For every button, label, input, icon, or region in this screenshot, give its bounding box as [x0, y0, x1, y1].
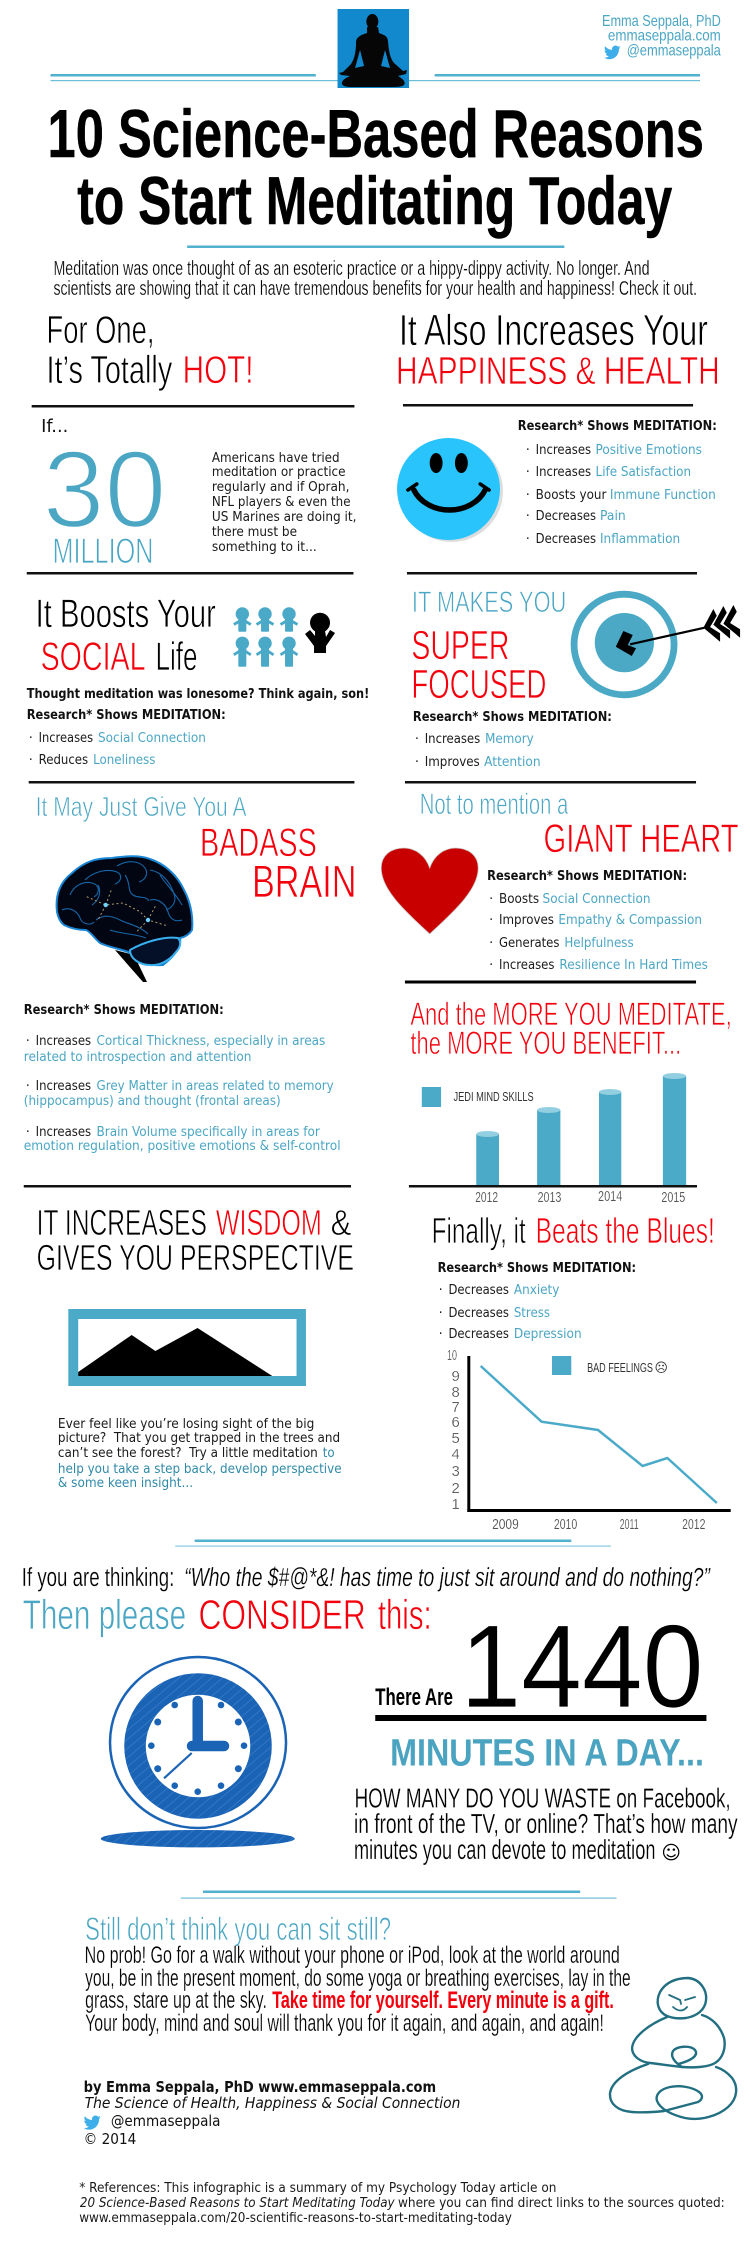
panel: beats the blues: Research* Shows MEDITATION: — [438, 1261, 636, 1276]
list: brain benefits: Increases — [36, 1079, 91, 1094]
bar chart: jedi mind skills: 2012 — [475, 1189, 498, 1206]
references: www.emmaseppala.com/20-scientific-reasons-to-start-meditating-today — [79, 2211, 512, 2226]
panel: wisdom and perspective: WISDOM — [216, 1203, 322, 1243]
text: americans: Americans have tried — [212, 451, 340, 466]
list: focus benefits: Memory — [485, 732, 534, 747]
references: 20 Science-Based Reasons to Start Meditating Today — [80, 2196, 395, 2211]
text: big picture: Ever feel like you’re losing sight of the big — [58, 1417, 314, 1432]
icon: clock — [101, 1657, 295, 1847]
text: how many do you waste: ☺ — [661, 1842, 681, 1864]
bar chart: jedi mind skills — [409, 1073, 697, 1206]
list: focus benefits: · — [415, 732, 419, 747]
line chart: bad feelings: 1 — [451, 1496, 460, 1513]
text: how many do you waste — [354, 1783, 738, 1865]
header rules — [50, 74, 700, 81]
panel: super focused — [411, 586, 740, 770]
panel: 30 million — [41, 416, 356, 571]
bar chart: jedi mind skills: JEDI MIND SKILLS — [453, 1089, 534, 1104]
panel: giant heart: Not to mention a — [420, 788, 569, 821]
list: brain benefits: Cortical Thickness, especially in areas — [97, 1034, 325, 1049]
line chart: bad feelings: BAD FEELINGS — [587, 1360, 653, 1375]
panel: more you meditate — [409, 996, 732, 1206]
list: heart benefits — [489, 892, 708, 973]
list: happiness benefits: Decreases — [536, 509, 596, 524]
list: heart benefits: Empathy & Compassion — [558, 913, 702, 928]
panel: wisdom and perspective: & — [331, 1203, 352, 1243]
list: focus benefits: Attention — [484, 755, 541, 770]
list: happiness benefits: · — [526, 532, 530, 547]
icon: people group — [234, 607, 298, 667]
author contact: Emma Seppala, PhD — [602, 13, 721, 30]
panel: badass brain: Research* Shows MEDITATION: — [24, 1003, 224, 1018]
line chart: bad feelings: 2011 — [620, 1516, 639, 1533]
text: americans: there must be — [212, 525, 297, 540]
panel: beats the blues: Finally, it — [432, 1211, 526, 1251]
list: mood benefits: · — [439, 1283, 443, 1298]
heading: totally hot — [47, 309, 253, 392]
list: social benefits: · — [29, 731, 33, 746]
stat: 1440 minutes: 1440 — [460, 1600, 703, 1732]
panel: super focused: FOCUSED — [411, 661, 547, 707]
icon: target and arrow — [574, 594, 740, 695]
heading: please consider this: this: — [378, 1591, 432, 1638]
author contact — [602, 13, 721, 60]
list: brain benefits: Grey Matter in areas related to memory — [97, 1079, 334, 1094]
text: big picture: to — [323, 1446, 335, 1461]
list: brain benefits — [24, 1034, 341, 1154]
icon: smiley — [397, 438, 503, 542]
list: happiness benefits: Decreases — [536, 532, 596, 547]
icon: framed mountain — [68, 1309, 306, 1386]
text: big picture: can’t see the forest? Try a little meditation — [58, 1446, 318, 1461]
author contact: @emmaseppala — [627, 42, 721, 60]
list: social benefits: Increases — [39, 731, 93, 746]
text: americans: regularly and if Oprah, — [212, 480, 350, 495]
stat: 1440 minutes: MINUTES IN A DAY... — [390, 1733, 704, 1775]
list: mood benefits: Decreases — [449, 1283, 509, 1298]
stat: 30 million: MILLION — [52, 532, 153, 571]
line chart: bad feelings: 2010 — [554, 1516, 577, 1533]
list: heart benefits: Helpfulness — [564, 936, 634, 951]
list: brain benefits: · — [26, 1034, 30, 1049]
line chart: bad feelings: 4 — [451, 1446, 460, 1463]
bar chart: jedi mind skills: 2015 — [661, 1189, 685, 1206]
panel: social life — [27, 592, 369, 768]
heading: if you are thinking: If you are thinking: — [22, 1564, 174, 1592]
list: social benefits: Social Connection — [98, 731, 206, 746]
line chart: bad feelings: 3 — [451, 1463, 460, 1480]
panel: giant heart: Research* Shows MEDITATION: — [487, 869, 687, 884]
references — [79, 2181, 725, 2226]
credits — [84, 2078, 460, 2148]
list: happiness benefits: Increases — [536, 443, 591, 458]
line chart: bad feelings: 7 — [451, 1399, 460, 1416]
list: brain benefits: emotion regulation, positive emotions & self-control — [24, 1139, 341, 1154]
stat: 1440 minutes: There Are — [375, 1684, 453, 1711]
panel: 30 million: If... — [41, 416, 68, 437]
credits: The Science of Health, Happiness & Social Connection — [85, 2094, 460, 2112]
list: mood benefits: Depression — [514, 1327, 582, 1342]
list: happiness benefits: · — [526, 465, 530, 480]
panel: happiness research — [397, 419, 717, 547]
list: heart benefits: Social Connection — [543, 892, 650, 907]
list: focus benefits — [415, 732, 541, 770]
list: brain benefits: Increases — [36, 1034, 91, 1049]
list: brain benefits: related to introspection and attention — [24, 1050, 251, 1065]
panel: badass brain — [24, 791, 356, 1154]
bar chart: jedi mind skills: 2014 — [598, 1188, 622, 1205]
icon: brain — [57, 856, 192, 982]
list: focus benefits: · — [415, 755, 419, 770]
heading: happiness and health — [396, 306, 720, 393]
list: happiness benefits: Boosts your — [536, 488, 607, 503]
icon: lone person — [305, 613, 335, 653]
list: social benefits: · — [29, 753, 33, 768]
line chart: bad feelings: 9 — [451, 1368, 460, 1385]
line chart: bad feelings: 2 — [451, 1480, 460, 1497]
panel: wisdom and perspective: IT INCREASES — [37, 1203, 207, 1243]
heading: totally hot: It’s Totally — [47, 349, 173, 392]
list: heart benefits: · — [489, 892, 493, 907]
panel: super focused: SUPER — [411, 622, 509, 668]
list: social benefits: Reduces — [39, 753, 88, 768]
list: brain benefits: · — [26, 1125, 30, 1140]
icon: meditator outline — [610, 1978, 736, 2119]
list: mood benefits: · — [439, 1327, 443, 1342]
line chart: bad feelings: 2012 — [682, 1516, 705, 1533]
panel: social life: Research* Shows MEDITATION: — [27, 708, 226, 723]
panel: social life: It Boosts Your — [36, 592, 216, 636]
list: happiness benefits — [526, 443, 716, 547]
panel: super focused: IT MAKES YOU — [412, 586, 566, 619]
panel: social life: Thought meditation was lonesome? Think again, son! — [27, 687, 369, 702]
list: brain benefits: Increases — [36, 1125, 91, 1140]
list: happiness benefits: · — [526, 509, 530, 524]
list: happiness benefits: Pain — [600, 509, 626, 524]
line chart: bad feelings: 2009 — [492, 1516, 519, 1533]
list: heart benefits: · — [489, 936, 493, 951]
text: big picture: help you take a step back, develop perspective — [58, 1462, 342, 1477]
list: mood benefits: Anxiety — [514, 1283, 560, 1298]
list: heart benefits: Boosts — [499, 892, 539, 907]
list: happiness benefits: · — [526, 488, 530, 503]
intro text — [53, 258, 697, 300]
list: heart benefits: Improves — [499, 913, 554, 928]
text: still don't think: grass, stare up at the sky. — [85, 1987, 267, 2014]
panel: social life: Life — [155, 635, 198, 679]
icon: twitter bird footer — [84, 2116, 101, 2130]
panel: badass brain: BRAIN — [252, 857, 356, 907]
text: big picture: & some keen insight... — [58, 1476, 193, 1491]
icon: heart — [381, 848, 478, 934]
list: focus benefits: Improves — [425, 755, 480, 770]
list: social benefits: Loneliness — [93, 753, 156, 768]
credits: @emmaseppala — [111, 2112, 220, 2130]
heading: please consider this: CONSIDER — [199, 1591, 366, 1638]
list: brain benefits: Brain Volume specifically in areas for — [97, 1125, 320, 1140]
credits: by Emma Seppala, PhD www.emmaseppala.com — [84, 2078, 436, 2096]
panel: badass brain: BADASS — [200, 821, 317, 865]
list: heart benefits: Resilience In Hard Times — [559, 958, 708, 973]
list: brain benefits: (hippocampus) and thought (frontal areas) — [24, 1094, 281, 1109]
panel: social life: SOCIAL — [41, 635, 146, 679]
panel: wisdom and perspective — [37, 1203, 354, 1491]
stat: 30 million: 30 — [43, 429, 166, 551]
line chart: bad feelings: 6 — [451, 1414, 460, 1431]
references: * References: This infographic is a summary of my Psychology Today article on — [79, 2181, 556, 2196]
bar chart: jedi mind skills: 2013 — [538, 1189, 561, 1206]
list: heart benefits: Generates — [499, 936, 560, 951]
panel: badass brain: It May Just Give You A — [36, 791, 247, 822]
list: brain benefits: · — [26, 1079, 30, 1094]
panel: super focused: Research* Shows MEDITATION: — [413, 710, 612, 725]
heading: totally hot: For One, — [47, 309, 154, 352]
list: happiness benefits: Life Satisfaction — [596, 465, 691, 480]
text: still don't think — [85, 1911, 631, 2037]
list: happiness benefits: · — [526, 443, 530, 458]
text: americans: US Marines are doing it, — [212, 510, 356, 525]
text: big picture: picture? That you get trapped in the trees and — [58, 1431, 340, 1446]
list: heart benefits: · — [489, 913, 493, 928]
line chart: bad feelings — [447, 1347, 731, 1533]
text: still don't think: Still don’t think you can sit still? — [85, 1911, 391, 1947]
list: mood benefits — [439, 1283, 582, 1342]
list: happiness benefits: Immune Function — [610, 488, 716, 503]
list: happiness benefits: Increases — [536, 465, 591, 480]
heading: please consider this: Then please — [23, 1591, 186, 1638]
text: americans: meditation or practice — [212, 465, 346, 480]
text: americans — [212, 451, 356, 555]
icon: meditating silhouette — [338, 9, 409, 88]
panel: wisdom and perspective: GIVES YOU PERSPECTIVE — [37, 1238, 354, 1278]
line chart: bad feelings: ☹ — [654, 1361, 668, 1376]
text: americans: something to it... — [212, 540, 317, 555]
list: heart benefits: Increases — [499, 958, 555, 973]
list: social benefits — [29, 731, 206, 768]
text: big picture — [58, 1417, 342, 1491]
panel: happiness research: Research* Shows MEDITATION: — [518, 419, 717, 434]
list: focus benefits: Increases — [425, 732, 480, 747]
references: where you can find direct links to the sources quoted: — [398, 2196, 725, 2211]
heading: please consider this — [23, 1591, 432, 1638]
credits: © 2014 — [84, 2130, 136, 2148]
panel: giant heart — [381, 788, 739, 973]
list: heart benefits: · — [489, 958, 493, 973]
line chart: bad feelings: 10 — [447, 1347, 457, 1364]
list: mood benefits: · — [439, 1306, 443, 1321]
line chart: bad feelings: 8 — [451, 1384, 460, 1401]
icon: twitter bird — [604, 46, 621, 59]
author contact: emmaseppala.com — [608, 27, 721, 45]
list: happiness benefits: Positive Emotions — [596, 443, 702, 458]
text: americans: NFL players & even the — [212, 495, 351, 510]
list: happiness benefits: Inflammation — [600, 532, 680, 547]
list: mood benefits: Decreases — [449, 1327, 509, 1342]
list: mood benefits: Decreases — [449, 1306, 509, 1321]
heading: totally hot: HOT! — [183, 349, 253, 392]
title — [48, 97, 704, 239]
list: mood benefits: Stress — [514, 1306, 550, 1321]
stat: 1440 minutes — [375, 1600, 706, 1775]
line chart: bad feelings: 5 — [451, 1430, 460, 1447]
panel: beats the blues — [432, 1211, 731, 1533]
